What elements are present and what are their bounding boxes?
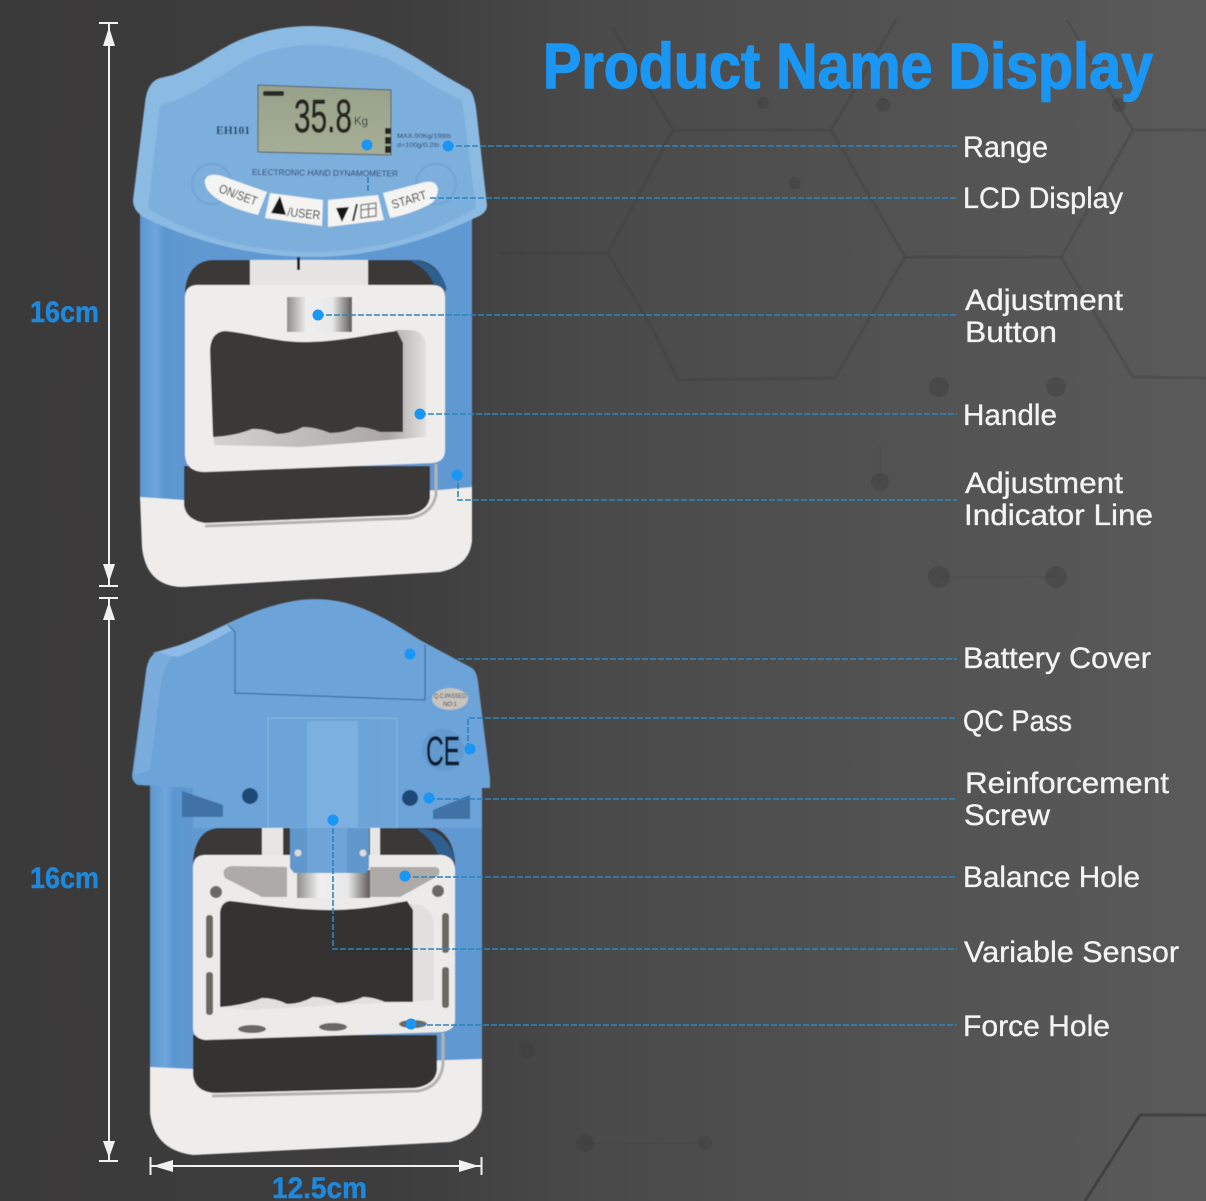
label: adjustment button (965, 284, 1124, 349)
callout: balance hole (400, 870, 957, 882)
back lower opening (193, 1035, 437, 1093)
back left column (150, 780, 194, 1070)
label: QC pass: QC Pass (963, 705, 1072, 738)
label: adjustment button: Button (965, 316, 1057, 349)
label: adjustment indicator line: Indicator Line (964, 499, 1153, 532)
back white posts (262, 828, 380, 858)
model number: EH101 (216, 123, 250, 137)
front stem mark (297, 257, 300, 270)
back body (150, 770, 482, 1155)
label: battery cover: Battery Cover (963, 642, 1151, 675)
callout: QC pass (464, 718, 957, 754)
callout: LCD display (362, 140, 957, 198)
CE mark: CE (426, 728, 460, 774)
range print: d=100g/0.2lb (397, 142, 439, 149)
button: START: START (390, 188, 429, 212)
device name print: ELECTRONIC HAND DYNAMOMETER (252, 167, 398, 179)
LCD display (258, 85, 391, 155)
QC pass badge: Q.C.PASSED (434, 694, 467, 700)
label: force hole: Force Hole (963, 1010, 1110, 1043)
LCD display: 35.8 (294, 90, 352, 142)
side button recesses (192, 164, 456, 204)
front knob (287, 297, 352, 332)
back knob (297, 870, 370, 898)
CE mark shade (422, 729, 464, 771)
front opening dark blue corner (412, 260, 447, 290)
dimension arrow: upper height (99, 22, 118, 587)
device: back view (132, 599, 490, 1155)
back handle (193, 855, 455, 1040)
variable sensor block (290, 828, 369, 873)
dimension arrow: lower height (99, 597, 118, 1162)
front opening upper (185, 260, 445, 300)
vents (182, 791, 470, 819)
QC pass badge: NO:1 (443, 702, 458, 708)
device: front view (133, 26, 487, 587)
button: down / book (328, 195, 384, 227)
label: variable sensor: Variable Sensor (964, 936, 1179, 969)
front head face (148, 45, 476, 252)
button: up / USER: /USER (287, 205, 321, 222)
front body (140, 205, 472, 587)
front handle hole (210, 331, 403, 437)
back handle cut-outs (224, 866, 439, 897)
label: reinforcement screw: Screw (964, 799, 1050, 832)
label: adjustment indicator line (964, 467, 1153, 532)
callout: variable sensor (328, 814, 957, 949)
callout: adjustment indicator line (452, 470, 957, 500)
callout: reinforcement screw (424, 792, 957, 804)
label: reinforcement screw (964, 767, 1170, 832)
dimension label: upper 16cm: 16cm (30, 296, 99, 329)
button: START (383, 182, 438, 218)
reinforcement screws (242, 788, 418, 806)
battery cover (228, 625, 425, 700)
label: LCD display: LCD Display (963, 182, 1123, 215)
front white base (140, 487, 472, 587)
front head rim (133, 26, 487, 257)
range print: MAX.90Kg/198lb (397, 133, 451, 140)
label: reinforcement screw: Reinforcement (965, 767, 1170, 800)
back opening upper (193, 828, 455, 870)
label: balance hole: Balance Hole (963, 861, 1140, 894)
range print (397, 133, 451, 149)
LCD display: Kg (354, 114, 368, 128)
back head (132, 599, 490, 828)
front left column (140, 205, 185, 500)
front metal strip (205, 464, 436, 526)
back handle inner wall (220, 901, 434, 1010)
label: adjustment indicator line: Adjustment (965, 467, 1124, 500)
callout: adjustment button (312, 310, 957, 320)
back handle hole (220, 901, 413, 1007)
callout: force hole (406, 1018, 957, 1030)
back white base (150, 1059, 482, 1155)
callout: handle (414, 408, 957, 420)
back handle holes (206, 885, 449, 1033)
front handle wall shadow (212, 330, 426, 447)
background hexagon pattern (500, 20, 1206, 1201)
QC pass badge (432, 688, 468, 710)
label: handle: Handle (963, 399, 1057, 432)
dimension arrow: width (150, 1157, 482, 1175)
dimension label: lower 16cm: 16cm (30, 862, 99, 895)
label: adjustment button: Adjustment (965, 284, 1124, 317)
button: ON/SET: ON/SET (217, 182, 260, 209)
button: ON/SET (205, 175, 267, 215)
front handle (185, 285, 445, 472)
front stem (250, 260, 368, 300)
back metal strip (212, 1033, 443, 1096)
callout: battery cover (404, 648, 957, 660)
title: Product Name Display (543, 30, 1153, 102)
back opening dark blue corner (418, 828, 455, 860)
central housing (268, 718, 397, 828)
callout: range (442, 140, 957, 152)
back head highlight (152, 625, 232, 657)
front lower opening (184, 466, 430, 523)
button: up / USER (265, 193, 323, 226)
back head left shade (134, 652, 172, 775)
label: range: Range (963, 131, 1048, 164)
